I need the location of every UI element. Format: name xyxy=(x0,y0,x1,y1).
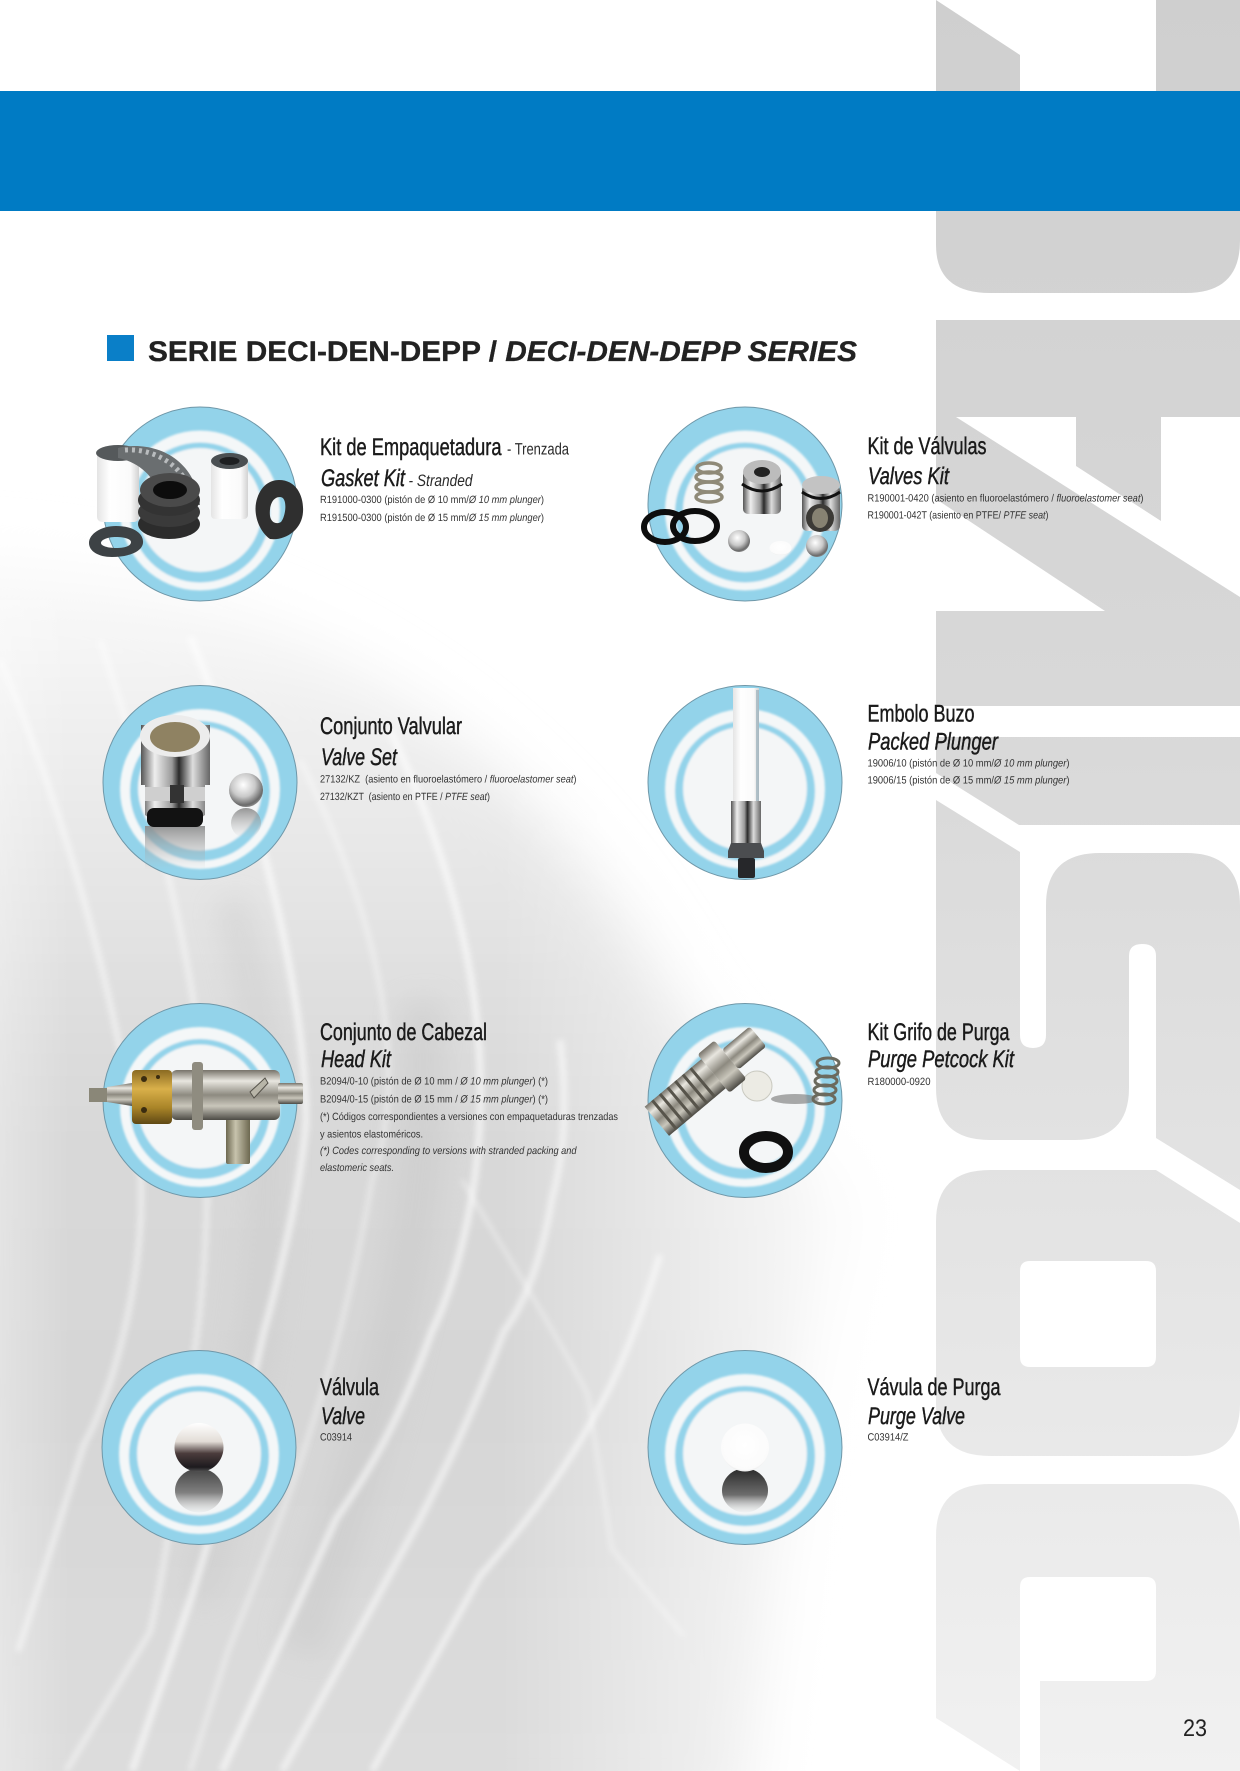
section title xyxy=(107,335,857,368)
part code: C03914 xyxy=(320,1432,352,1444)
icon: gasket kit disc and parts xyxy=(89,407,303,601)
part codes: 19006/15 (pistón de Ø 15 mm/Ø 15 mm plunger) xyxy=(868,774,1070,786)
heading: Valve Set: Valve Set xyxy=(321,744,398,771)
panel: purge valve xyxy=(648,1350,1001,1544)
heading: Purge Petcock Kit: Purge Petcock Kit xyxy=(868,1046,1015,1073)
part codes: R190001-0420 (asiento en fluoroelastómero / fluoroelastomer seat) xyxy=(868,492,1144,504)
title text: SERIE DECI-DEN-DEPP / DECI-DEN-DEPP SERIES xyxy=(148,336,857,368)
heading: Embolo Buzo: Embolo Buzo xyxy=(868,700,974,728)
heading: Válvula: Válvula xyxy=(320,1374,379,1401)
heading: Conjunto Valvular: Conjunto Valvular xyxy=(320,713,462,740)
watermark: giant rotated grey lettering xyxy=(936,0,1240,1771)
icon: valves kit disc and parts xyxy=(644,407,842,601)
part codes and footnote: (*) Codes corresponding to versions with stranded packing and xyxy=(320,1145,578,1157)
heading: Vávula de Purga: Vávula de Purga xyxy=(868,1374,1001,1401)
part codes and footnote: (*) Códigos correspondientes a versiones con empaquetaduras trenzadas xyxy=(320,1111,618,1123)
part codes: 19006/10 (pistón de Ø 10 mm/Ø 10 mm plunger) xyxy=(868,758,1070,770)
icon: valve ball disc xyxy=(102,1350,296,1544)
part codes: R191500-0300 (pistón de Ø 15 mm/Ø 15 mm plunger) xyxy=(320,512,544,524)
icon: plunger disc and part xyxy=(648,686,842,880)
part codes xyxy=(868,758,1070,786)
icon: head kit disc and part xyxy=(89,1004,303,1198)
heading: Valves Kit: Valves Kit xyxy=(868,463,950,490)
icon: purge valve ball disc xyxy=(648,1350,842,1544)
heading: Packed Plunger: Packed Plunger xyxy=(868,728,999,756)
panel: head kit xyxy=(89,1004,618,1198)
part codes and footnote xyxy=(320,1076,618,1174)
part codes xyxy=(868,492,1144,522)
part codes and footnote: B2094/0-10 (pistón de Ø 10 mm / Ø 10 mm plunger) (*) xyxy=(320,1076,548,1088)
part codes: R191000-0300 (pistón de Ø 10 mm/Ø 10 mm plunger) xyxy=(320,494,544,506)
panel: gasket kit xyxy=(89,407,570,601)
blue header band xyxy=(0,91,1240,211)
part code: C03914/Z xyxy=(868,1432,909,1444)
heading: Purge Valve: Purge Valve xyxy=(868,1403,965,1430)
part codes xyxy=(320,494,544,524)
part codes: R190001-042T (asiento en PTFE/ PTFE seat) xyxy=(868,510,1049,522)
panel: purge petcock kit xyxy=(641,1004,1015,1198)
part codes: 27132/KZ (asiento en fluoroelastómero / fluoroelastomer seat) xyxy=(320,774,576,786)
part code: R180000-0920 xyxy=(868,1076,931,1088)
heading: Valve: Valve xyxy=(321,1403,365,1430)
heading: Kit de Empaquetadura: Kit de Empaquetadura xyxy=(320,434,502,461)
icon: blue square bullet xyxy=(107,335,134,361)
heading: Conjunto de Cabezal: Conjunto de Cabezal xyxy=(320,1019,487,1046)
part codes and footnote: elastomeric seats. xyxy=(320,1162,394,1174)
part codes and footnote: y asientos elastoméricos. xyxy=(320,1128,423,1140)
panel: valve set xyxy=(103,686,576,880)
heading: Kit Grifo de Purga: Kit Grifo de Purga xyxy=(868,1019,1010,1046)
heading: Kit de Válvulas: Kit de Válvulas xyxy=(868,433,986,460)
heading: Gasket Kit: Gasket Kit xyxy=(321,465,406,492)
panel: packed plunger xyxy=(648,686,1070,880)
panel: valve xyxy=(102,1350,379,1544)
part codes and footnote: B2094/0-15 (pistón de Ø 15 mm / Ø 15 mm plunger) (*) xyxy=(320,1094,548,1106)
panel: valves kit xyxy=(644,407,1144,601)
part codes xyxy=(320,774,576,803)
sub heading: Trenzada: - Trenzada xyxy=(507,440,570,458)
page number: 23 xyxy=(1183,1715,1207,1742)
part codes: 27132/KZT (asiento en PTFE / PTFE seat) xyxy=(320,791,490,803)
icon: petcock disc and parts xyxy=(641,1004,842,1198)
heading: Head Kit: Head Kit xyxy=(321,1046,392,1073)
sub heading: Stranded: - Stranded xyxy=(408,472,473,490)
icon: valve set disc and parts xyxy=(103,686,297,880)
